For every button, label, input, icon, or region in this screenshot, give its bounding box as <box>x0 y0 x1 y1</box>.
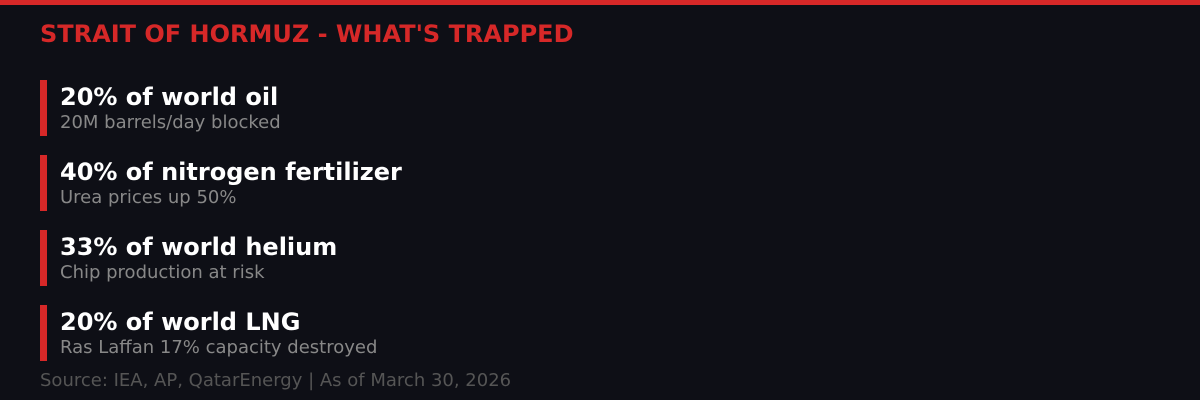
stat: world helium: Chip production at risk <box>60 262 265 283</box>
stat: world LNG <box>40 305 377 361</box>
stat: world LNG: 20% of world LNG <box>60 308 300 336</box>
top accent bar <box>0 0 1200 5</box>
stat: world oil: 20M barrels/day blocked <box>60 112 281 133</box>
stat: world LNG: Ras Laffan 17% capacity destroyed <box>60 337 377 358</box>
title: STRAIT OF HORMUZ - WHAT'S TRAPPED <box>40 20 573 48</box>
stat: world oil <box>40 80 281 136</box>
stat: world helium: 33% of world helium <box>60 233 337 261</box>
stat: nitrogen fertilizer: Urea prices up 50% <box>60 187 236 208</box>
stat: world oil: 20% of world oil <box>60 83 278 111</box>
source note: Source: IEA, AP, QatarEnergy | As of March 30, 2026 <box>40 370 511 391</box>
stat: world helium <box>40 230 337 286</box>
stat: nitrogen fertilizer: 40% of nitrogen fertilizer <box>60 158 402 186</box>
stat: nitrogen fertilizer <box>40 155 402 211</box>
